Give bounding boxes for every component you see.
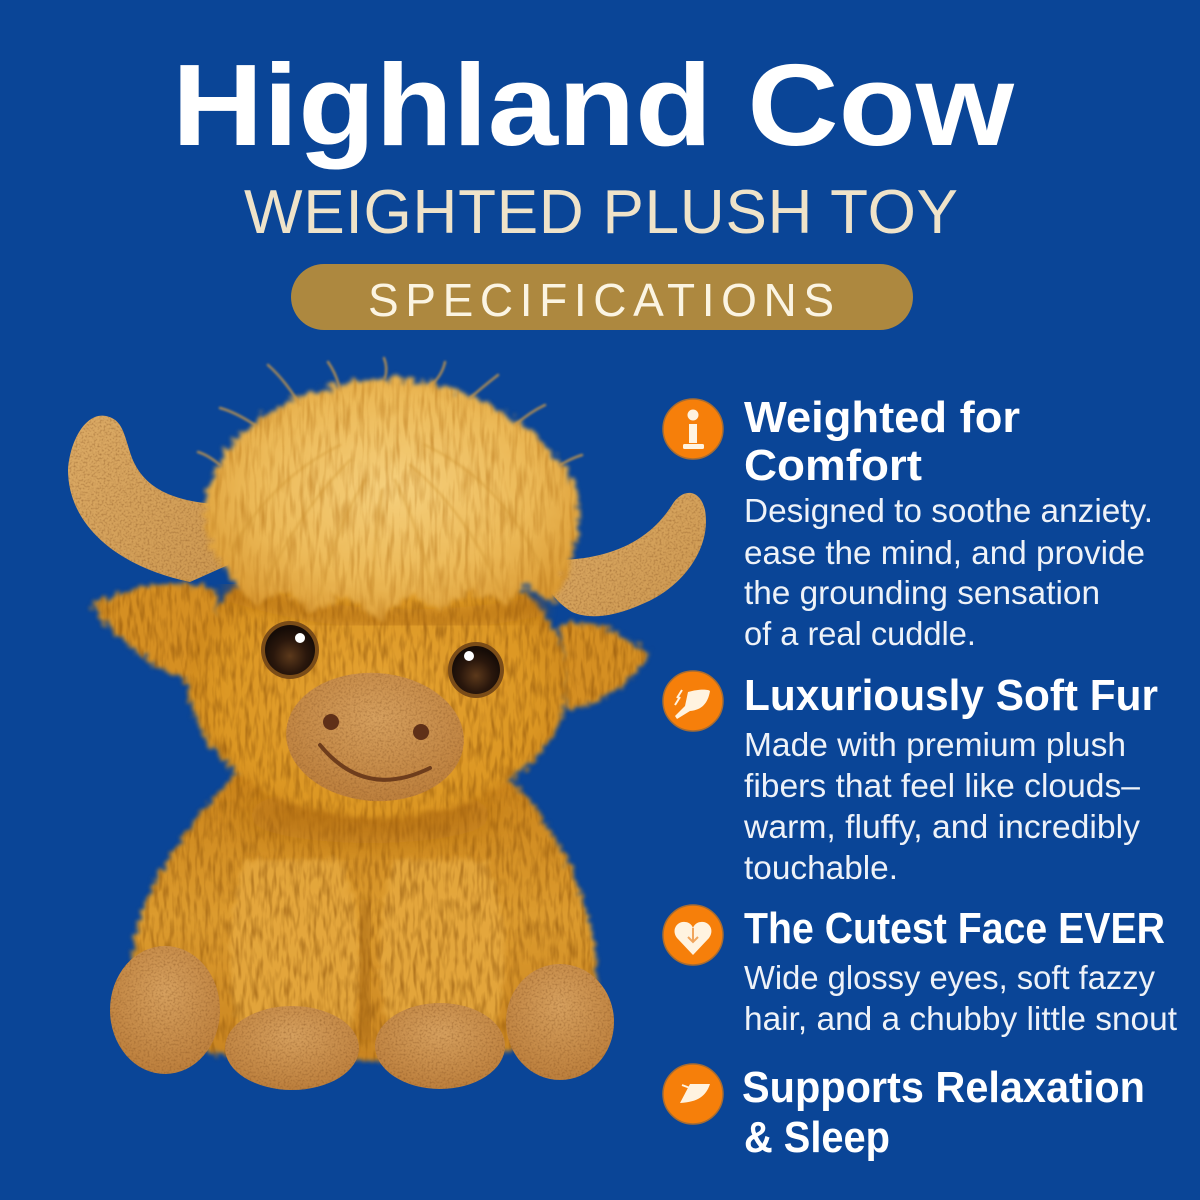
- description: warm, fluffy, and incredibly: [743, 808, 1141, 845]
- snout: [282, 667, 468, 807]
- specifications banner: [291, 264, 913, 330]
- description: Designed to soothe anziety.: [744, 492, 1153, 529]
- left horn: [68, 416, 228, 582]
- icon: feather: [663, 671, 723, 731]
- feature: supports relaxation and sleep: [663, 1063, 1145, 1162]
- icon: leaf: [663, 1064, 723, 1124]
- left eye: [261, 621, 319, 679]
- right horn: [544, 493, 706, 616]
- hair tuft: [204, 378, 579, 620]
- right eye: [448, 642, 504, 698]
- feature: the cutest face ever: [663, 904, 1177, 1037]
- hair strands: [232, 445, 540, 605]
- description: hair, and a chubby little snout: [744, 1000, 1177, 1037]
- heading: Supports Relaxation: [742, 1063, 1145, 1112]
- right front foot: [375, 1003, 505, 1089]
- head: [188, 542, 568, 818]
- left front leg: [230, 860, 359, 1045]
- body shadow under chin: [245, 787, 495, 843]
- description: ease the mind, and provide: [744, 534, 1145, 571]
- heading: Luxuriously Soft Fur: [744, 671, 1158, 720]
- icon: heart: [663, 905, 723, 965]
- left ear: [92, 584, 225, 682]
- description: fibers that feel like clouds–: [744, 767, 1141, 804]
- feature: luxuriously soft fur: [663, 671, 1158, 886]
- specifications banner: SPECIFICATIONS: [368, 274, 834, 326]
- heading: Weighted for: [744, 393, 1020, 442]
- left back foot: [110, 946, 220, 1074]
- feature: weighted for comfort: [663, 393, 1153, 652]
- description: touchable.: [744, 849, 898, 886]
- title: Highland Cow: [172, 40, 1015, 170]
- heading: & Sleep: [744, 1113, 890, 1162]
- right back foot: [506, 964, 614, 1080]
- description: Wide glossy eyes, soft fazzy: [744, 959, 1155, 996]
- hair wisps: [198, 358, 582, 465]
- shadow under fringe: [225, 590, 545, 619]
- subtitle: WEIGHTED PLUSH TOY: [244, 178, 958, 247]
- leg divider shadow: [363, 900, 368, 1040]
- description: the grounding sensation: [744, 574, 1100, 611]
- right ear: [560, 622, 650, 708]
- icon: info: [663, 399, 723, 459]
- description: of a real cuddle.: [744, 615, 976, 652]
- left front foot: [225, 1006, 359, 1090]
- heading: Comfort: [744, 441, 922, 490]
- plush highland cow illustration: [68, 358, 706, 1090]
- right front leg: [380, 860, 504, 1040]
- description: Made with premium plush: [744, 726, 1126, 763]
- body: [132, 770, 597, 1062]
